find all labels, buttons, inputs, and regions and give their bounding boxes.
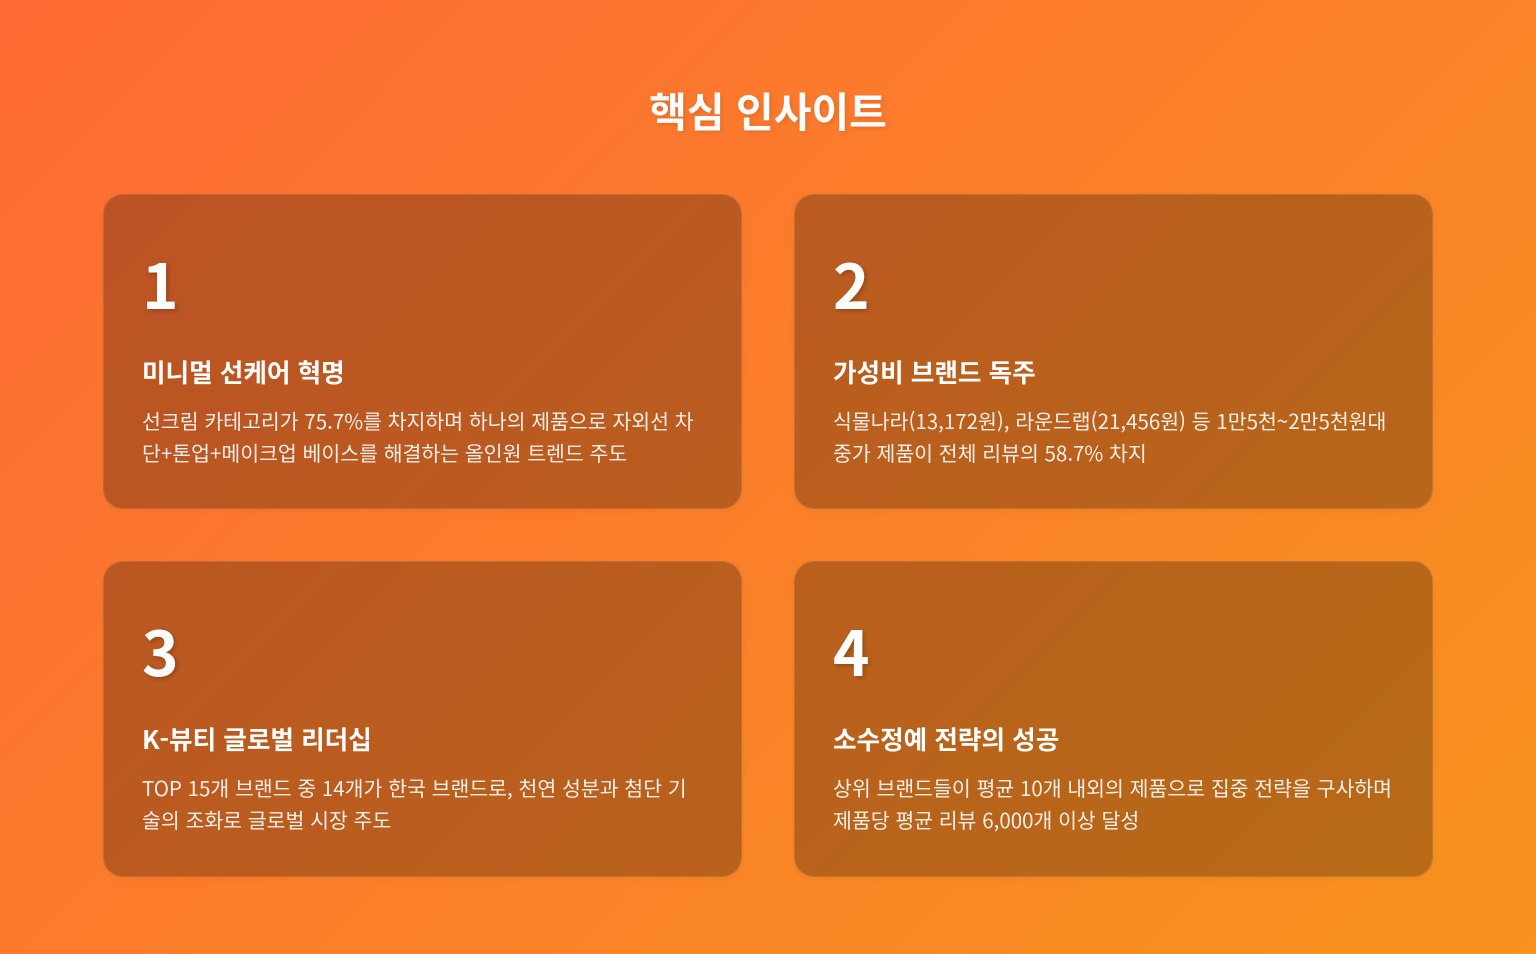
text block: insight 2: 식물나라(13,172원), 라운드랩(21,456원) 등 1만5천~2만5천원대 xyxy=(833,405,1386,435)
number 2: 2 xyxy=(833,237,870,327)
panel: insight 2 xyxy=(794,194,1433,509)
panel: insight 1 xyxy=(103,194,742,509)
number 4: 4 xyxy=(833,604,870,694)
text block: insight 4 xyxy=(833,772,1392,834)
heading: value brands: 가성비 브랜드 독주 xyxy=(833,353,1036,390)
text block: insight 2: 중가 제품이 전체 리뷰의 58.7% 차지 xyxy=(833,437,1147,467)
number 1: 1 xyxy=(142,237,179,327)
panel: insight 4 xyxy=(794,561,1433,877)
text block: insight 3: 술의 조화로 글로벌 시장 주도 xyxy=(142,804,391,834)
title: 핵심 인사이트 xyxy=(649,79,887,139)
text block: insight 4: 제품당 평균 리뷰 6,000개 이상 달성 xyxy=(833,804,1139,834)
text block: insight 1: 선크림 카테고리가 75.7%를 차지하며 하나의 제품으로 자외선 차 xyxy=(142,405,694,435)
heading: focus strategy: 소수정예 전략의 성공 xyxy=(833,720,1059,757)
text block: insight 3: TOP 15개 브랜드 중 14개가 한국 브랜드로, 천연 성분과 첨단 기 xyxy=(142,772,687,802)
panel: insight 3 xyxy=(103,561,742,877)
number 3: 3 xyxy=(142,604,179,694)
heading: minimal suncare: 미니멀 선케어 혁명 xyxy=(142,353,345,390)
text block: insight 1: 단+톤업+메이크업 베이스를 해결하는 올인원 트렌드 주도 xyxy=(142,437,627,467)
text block: insight 3 xyxy=(142,772,687,834)
heading: k-beauty leadership: K-뷰티 글로벌 리더십 xyxy=(142,720,372,757)
text block: insight 2 xyxy=(833,405,1386,467)
text block: insight 4: 상위 브랜드들이 평균 10개 내외의 제품으로 집중 전략을 구사하며 xyxy=(833,772,1392,802)
text block: insight 1 xyxy=(142,405,694,467)
